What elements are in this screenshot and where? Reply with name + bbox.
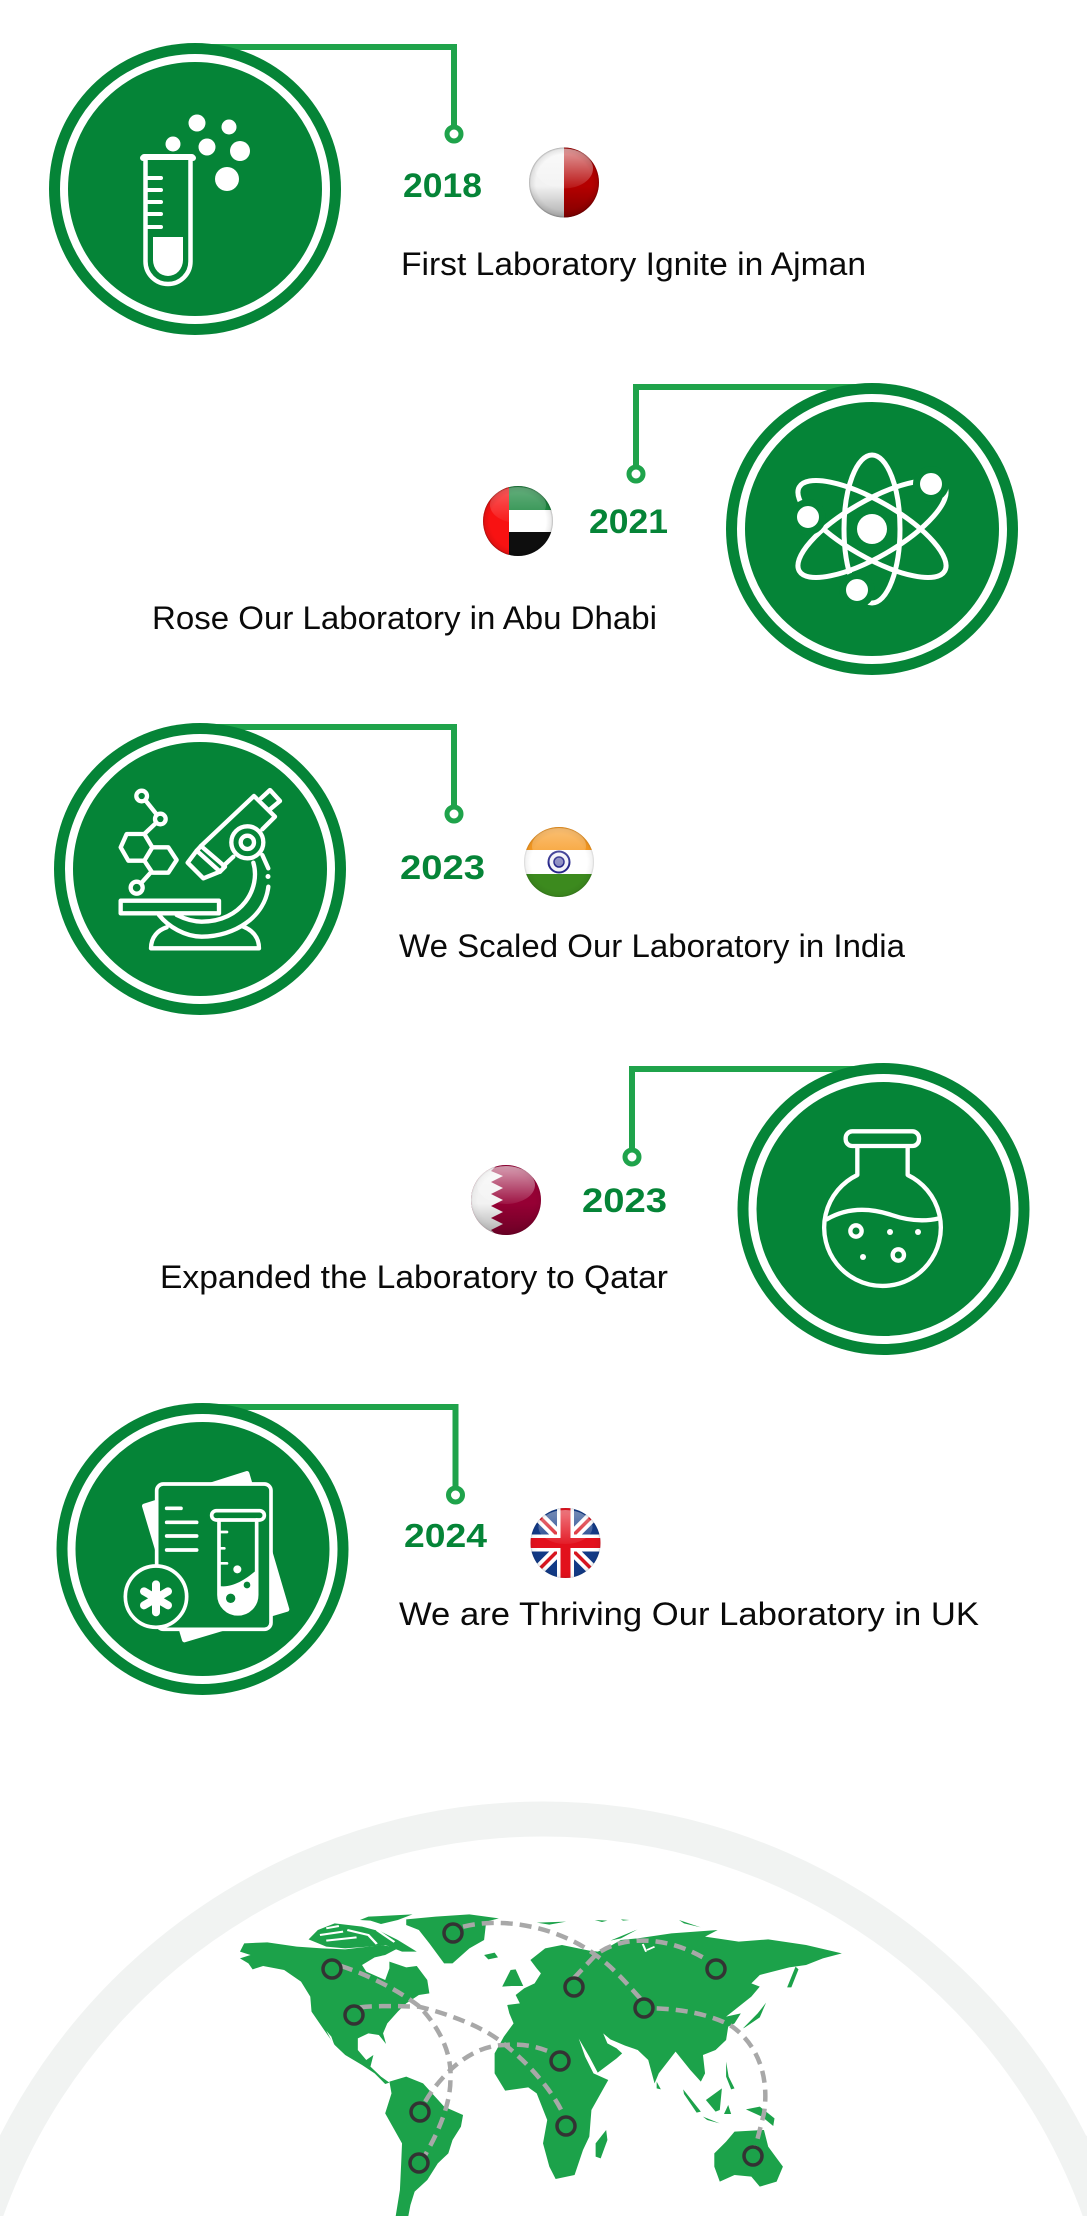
year 2024: 2024 <box>404 1517 488 1554</box>
icon badge: microscope <box>54 723 346 1015</box>
description 2024: We are Thriving Our Laboratory in UK <box>399 1596 979 1632</box>
location markers <box>323 1924 762 2172</box>
panel: milestone 2023 Qatar <box>160 1063 1030 1355</box>
connector 2023 India <box>205 727 461 821</box>
world map <box>237 1914 842 2216</box>
description 2023 Qatar: Expanded the Laboratory to Qatar <box>160 1259 668 1295</box>
arctic islands <box>309 1914 417 1952</box>
dashed flight routes <box>341 1923 765 2155</box>
connector 2023 Qatar <box>625 1069 880 1164</box>
connector 2018 <box>200 47 461 141</box>
connector 2021 <box>629 387 870 481</box>
greenland <box>406 1914 499 1963</box>
year 2023 India: 2023 <box>400 849 485 887</box>
flag: UK <box>530 1507 602 1579</box>
panel: milestone 2024 <box>56 1403 979 1695</box>
connector 2024 <box>205 1407 462 1502</box>
year 2023 Qatar: 2023 <box>582 1182 667 1220</box>
description 2018: First Laboratory Ignite in Ajman <box>401 246 866 282</box>
panel: milestone 2023 India <box>54 723 905 1015</box>
madagascar <box>596 2130 607 2158</box>
south america <box>385 2077 463 2216</box>
icon badge: atom <box>726 383 1018 675</box>
continents <box>237 1914 842 2216</box>
year 2021: 2021 <box>589 503 668 541</box>
flag: Ajman <box>528 146 600 218</box>
icon badge: lab report <box>56 1403 348 1695</box>
panel: milestone 2018 <box>49 43 866 335</box>
panel: milestone 2021 <box>152 383 1018 675</box>
description 2021: Rose Our Laboratory in Abu Dhabi <box>152 600 657 636</box>
flag: UAE <box>482 485 554 558</box>
eurasia and africa <box>495 1930 842 2179</box>
uk and ireland <box>502 1969 523 1987</box>
asia pacific islands <box>537 1919 798 2126</box>
flag: India <box>523 826 595 898</box>
globe arc <box>0 1802 1087 2216</box>
description 2023 India: We Scaled Our Laboratory in India <box>399 928 905 964</box>
north america <box>237 1942 429 2084</box>
year 2018: 2018 <box>403 167 482 205</box>
australia <box>714 2130 783 2187</box>
iceland <box>484 1953 498 1959</box>
icon badge: flask <box>738 1063 1030 1355</box>
icon badge: test tube <box>49 43 341 335</box>
baja sliver <box>326 2031 336 2048</box>
flag: Qatar <box>470 1164 542 1236</box>
